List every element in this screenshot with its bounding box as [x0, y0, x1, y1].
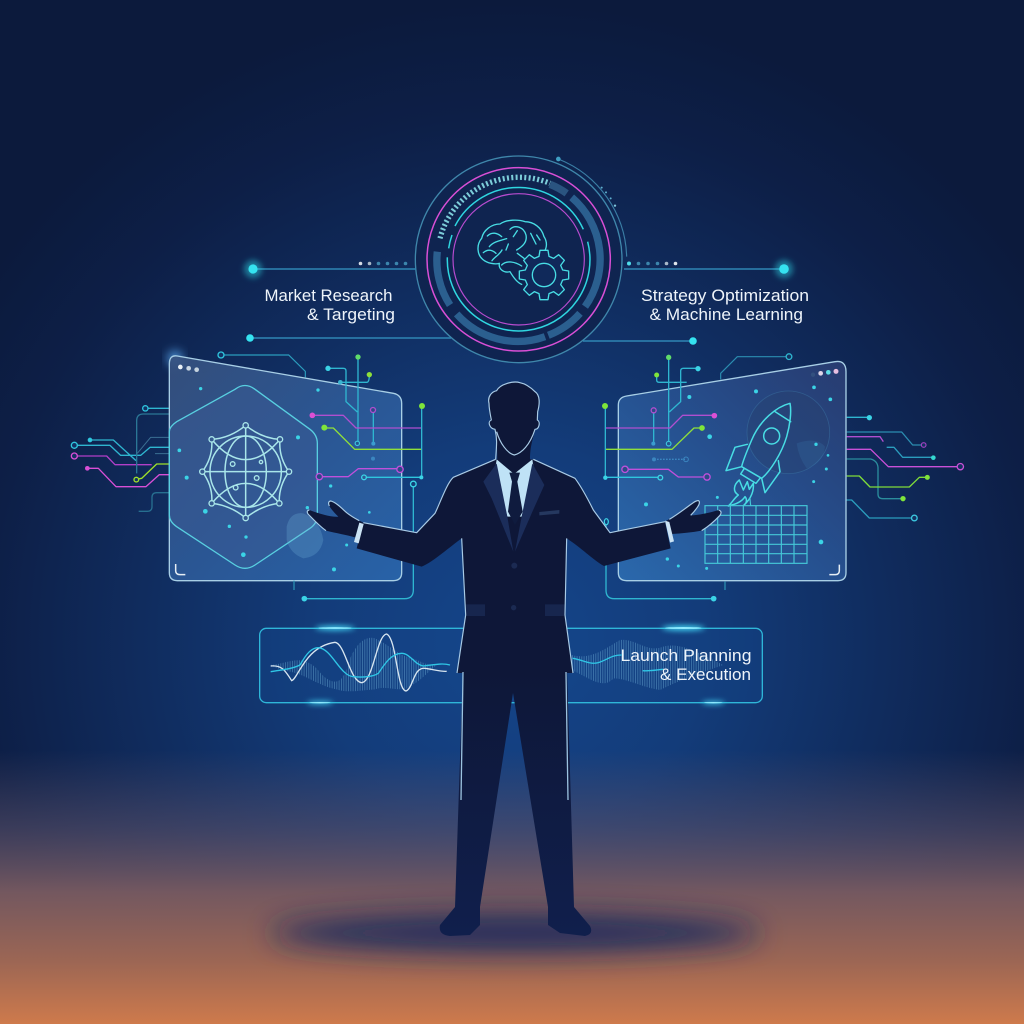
icon: fingerprint blob [287, 513, 323, 558]
shirt cuffs [354, 521, 674, 543]
label: Launch Planning & Execution [620, 646, 752, 684]
jacket buttons [511, 563, 517, 610]
heading: Market Research & Targeting: Market Research [264, 287, 392, 305]
glass panel [169, 356, 402, 581]
silhouette rim light [307, 382, 721, 673]
connector: top right line with node [624, 260, 793, 278]
heading: Strategy Optimization & Machine Learning [641, 287, 809, 324]
scattered data dots [177, 387, 371, 571]
waveform line: right cyan [573, 655, 663, 671]
heading: Market Research & Targeting [264, 287, 395, 324]
panel: launch planning waveform [260, 625, 762, 704]
connector: second left line [246, 334, 451, 342]
breast pocket [539, 510, 559, 515]
chart: launch grid [705, 498, 807, 563]
connector: top left line with node [244, 260, 416, 278]
icon: gear [519, 250, 569, 300]
icon: brain [478, 220, 546, 284]
scattered data dots [644, 385, 832, 570]
glass panel [618, 361, 846, 581]
panel corner bracket [176, 564, 185, 575]
faint planet [747, 391, 830, 474]
head [489, 382, 539, 460]
panel frame [260, 628, 762, 703]
heading: Market Research & Targeting: & Targeting [307, 306, 395, 324]
lapels [483, 463, 544, 552]
label: Launch Planning & Execution: Launch Planning [620, 646, 752, 665]
heading: Strategy Optimization & Machine Learning: & Machine Learning [650, 306, 803, 324]
panel corner bracket [829, 565, 839, 575]
tie [508, 473, 523, 525]
circuit trace above panel [221, 355, 305, 377]
panel: market research screen [71, 350, 425, 601]
circuit traces right of panel [721, 357, 960, 590]
circuit traces left of panel [77, 408, 169, 511]
trouser rim light [461, 672, 568, 800]
icon: networked globe [200, 423, 292, 521]
icon: rocket [726, 403, 791, 506]
suit jacket [307, 382, 721, 673]
hands [307, 501, 721, 537]
hexagon [169, 385, 317, 568]
connector: second right line [583, 337, 697, 345]
label: Launch Planning & Execution: & Execution [660, 665, 751, 684]
emblem disc [415, 156, 622, 363]
heading: Strategy Optimization & Machine Learning: Strategy Optimization [641, 287, 809, 305]
waveform bands [270, 638, 723, 691]
frame glow cores [309, 627, 723, 703]
legs and shoes [440, 670, 591, 936]
shirt and collar [495, 459, 534, 517]
panel: launch rocket screen [602, 354, 963, 601]
circuit traces on panel right [294, 357, 422, 599]
jacket pockets [466, 604, 565, 616]
central brain and gear emblem [415, 156, 627, 363]
frame glows [307, 625, 725, 704]
person silhouette [307, 382, 721, 936]
ground shadow [270, 913, 760, 953]
window dots [811, 369, 838, 377]
circuit traces on panel left [605, 357, 714, 599]
waveform line: cyan [271, 648, 450, 677]
panel glow [167, 350, 183, 366]
waveform line: white [271, 634, 447, 691]
window dots [178, 365, 206, 373]
emblem rings [427, 157, 627, 351]
